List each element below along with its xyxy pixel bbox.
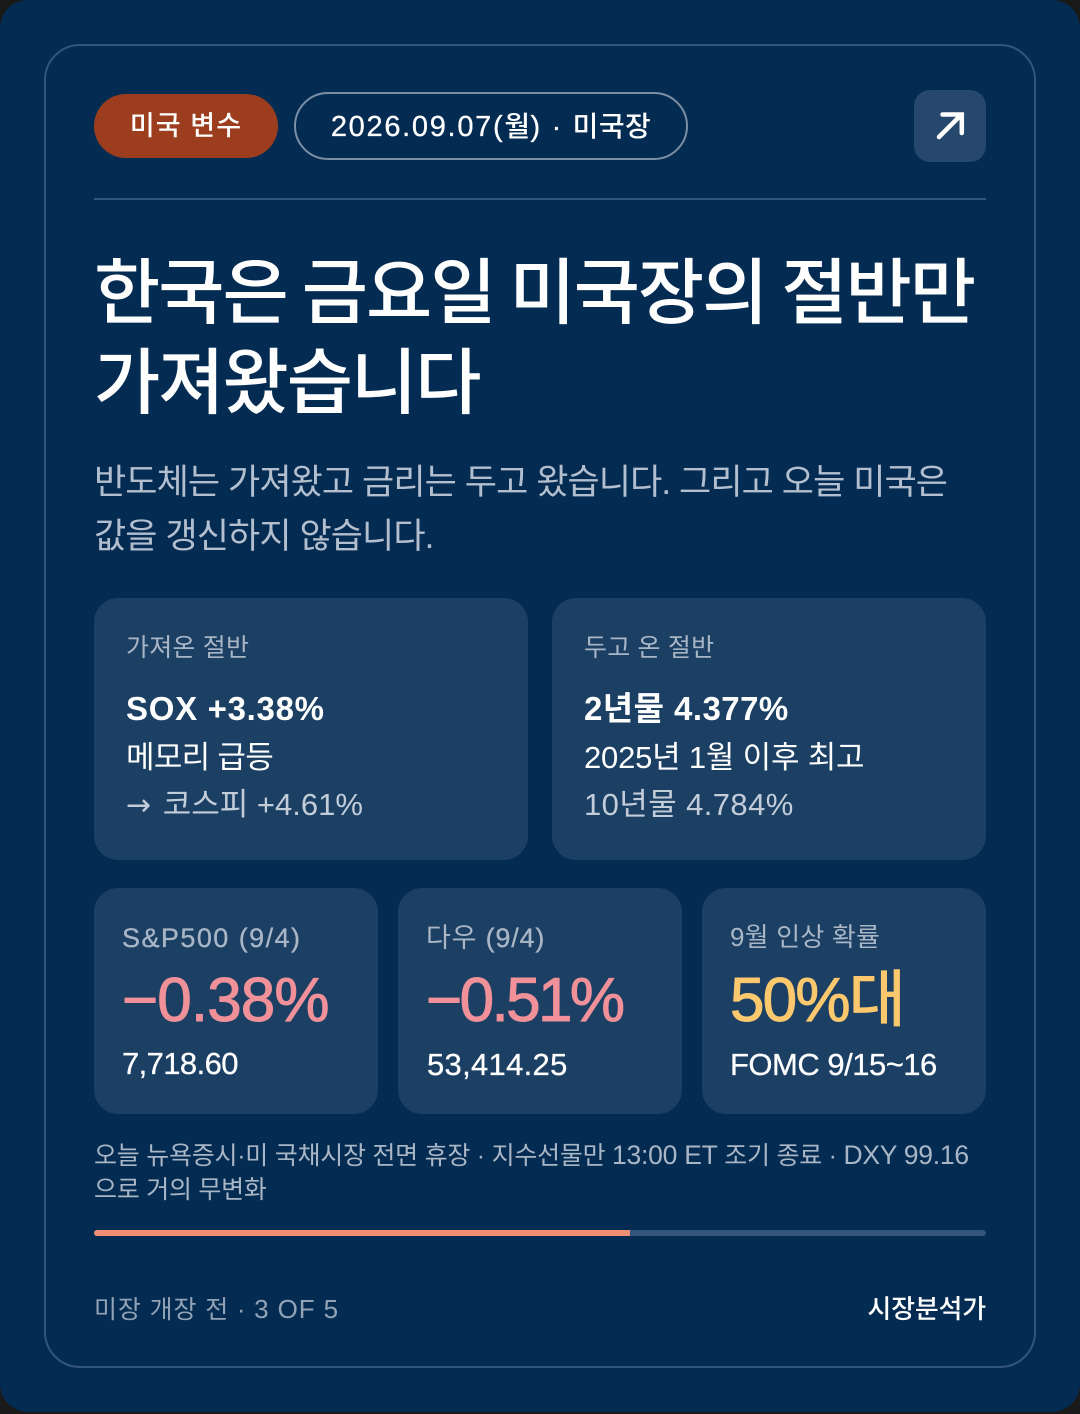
title: 한국은 금요일 미국장의 절반만 <box>94 254 974 334</box>
panel detail: 메모리 급등 <box>126 740 273 775</box>
stat detail: 7,718.60 <box>122 1046 238 1081</box>
footer right: 시장분석가 <box>867 1294 986 1324</box>
stat value: 50%대 <box>730 966 904 1035</box>
footnote: 으로 거의 무변화 <box>94 1176 267 1204</box>
stat label: 다우 (9/4) <box>426 923 545 953</box>
stat detail: FOMC 9/15~16 <box>730 1047 937 1082</box>
stat value: −0.38% <box>122 966 329 1035</box>
title: 가져왔습니다 <box>94 344 479 424</box>
stat: Dow <box>398 888 682 1114</box>
panel detail: 2025년 1월 이후 최고 <box>584 740 864 775</box>
badge: category: 미국 변수 <box>130 111 242 141</box>
stat value: −0.51% <box>426 966 622 1035</box>
stat: S&P500 <box>94 888 378 1114</box>
badge: category <box>94 94 278 158</box>
panel sub detail: → 코스피 +4.61% <box>126 787 363 823</box>
title <box>94 254 974 424</box>
subtitle <box>94 463 947 556</box>
badge: date <box>294 92 688 160</box>
progress bar <box>94 1230 986 1236</box>
panel label: 두고 온 절반 <box>584 634 714 662</box>
panel sub detail: 10년물 4.784% <box>584 787 794 822</box>
stat label: S&P500 (9/4) <box>122 923 302 953</box>
progress fill <box>94 1230 630 1236</box>
footnote <box>94 1140 969 1204</box>
icon: arrow button <box>914 90 986 162</box>
subtitle: 값을 갱신하지 않습니다. <box>94 517 433 556</box>
header divider <box>94 198 986 200</box>
panel: half left <box>552 598 986 860</box>
footer left: 미장 개장 전 · 3 OF 5 <box>94 1294 339 1324</box>
footnote: 오늘 뉴욕증시·미 국채시장 전면 휴장 · 지수선물만 13:00 ET 조기 종료 · DXY 99.16 <box>94 1140 969 1170</box>
stat detail: 53,414.25 <box>427 1047 568 1082</box>
badge: date: 2026.09.07(월) · 미국장 <box>331 111 651 143</box>
subtitle: 반도체는 가져왔고 금리는 두고 왔습니다. 그리고 오늘 미국은 <box>94 463 947 502</box>
stat label: 9월 인상 확률 <box>730 922 880 952</box>
panel label: 가져온 절반 <box>126 634 249 662</box>
panel headline: SOX +3.38% <box>126 690 325 727</box>
stat: hike odds <box>702 888 986 1114</box>
panel headline: 2년물 4.377% <box>584 690 789 727</box>
panel: half taken <box>94 598 528 860</box>
